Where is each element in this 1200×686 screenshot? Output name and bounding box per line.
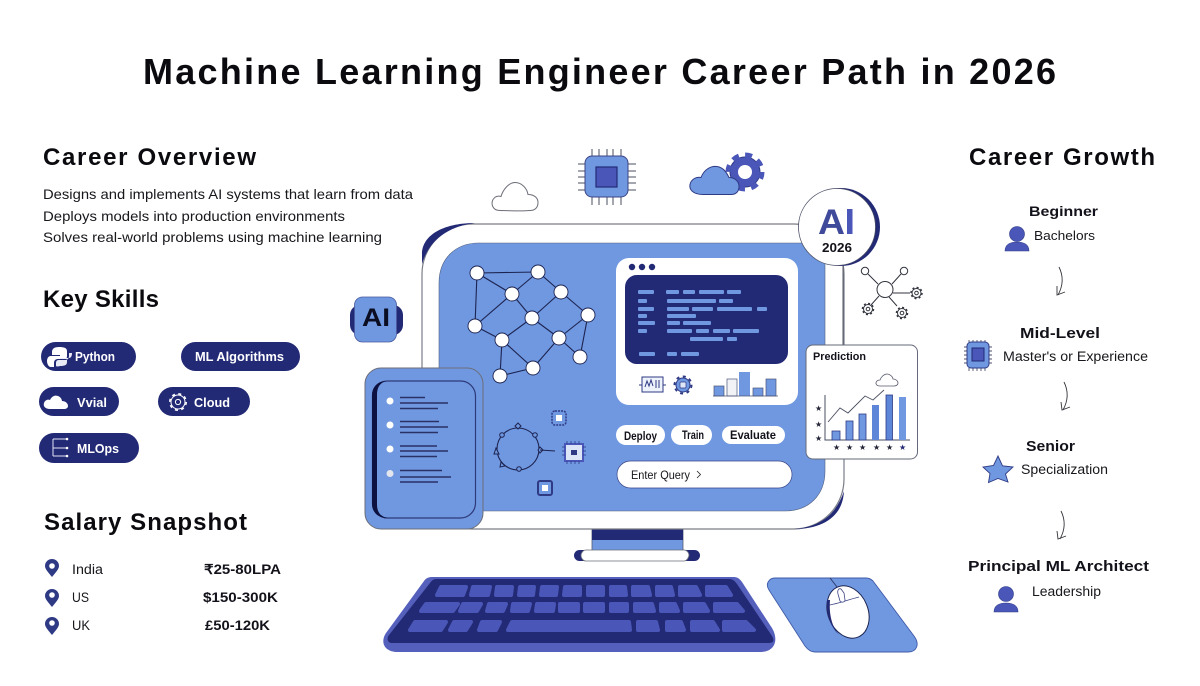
tablet xyxy=(365,368,483,529)
icon: AI robot: AI xyxy=(362,304,390,332)
heading: career overview: Career Overview xyxy=(43,144,256,171)
row: us: $150-300K xyxy=(203,590,278,605)
text block: overview points: Designs and implements AI systems that learn from data xyxy=(43,186,413,202)
button: deploy: Deploy xyxy=(624,431,658,443)
skill pill: mlops: MLOps xyxy=(77,441,119,456)
row: india: India xyxy=(72,562,104,577)
input: enter query xyxy=(617,461,792,488)
icon: small cloud xyxy=(876,374,898,386)
monitor screen xyxy=(439,243,825,511)
code window xyxy=(616,258,798,405)
row: uk xyxy=(45,617,270,635)
icon: small chip bottom xyxy=(538,481,552,495)
stage: principal ml architect xyxy=(968,559,1149,612)
panel: prediction chart xyxy=(806,345,918,459)
mouse pad xyxy=(767,578,917,652)
arrow: senior to principal xyxy=(1057,511,1066,539)
text block: overview points: Deploys models into production environments xyxy=(43,208,345,224)
bars and trend line xyxy=(815,390,910,452)
stage: principal ml architect: Leadership xyxy=(1032,584,1101,599)
skill pill: vvial: Vvial xyxy=(77,396,107,410)
panel: career growth xyxy=(964,144,1155,612)
row: us: US xyxy=(72,590,89,605)
row: uk: UK xyxy=(72,618,90,633)
stage: beginner xyxy=(1005,203,1099,251)
ring network with chips xyxy=(494,411,586,495)
heading: career growth: Career Growth xyxy=(969,144,1155,171)
icon: gear network xyxy=(861,267,922,318)
row: us xyxy=(45,589,278,607)
monitor xyxy=(422,223,844,561)
button: train xyxy=(671,425,712,445)
stage: senior: Specialization xyxy=(1021,462,1108,477)
skill pill: python xyxy=(41,342,136,371)
bars and trend line: ★ xyxy=(899,443,906,452)
keys xyxy=(410,587,754,630)
bars and trend line: ★ xyxy=(859,443,866,452)
badge: AI 2026: A xyxy=(818,203,845,242)
icon: small chip middle xyxy=(562,441,586,464)
network graph xyxy=(468,265,595,383)
button: evaluate: Evaluate xyxy=(730,430,776,442)
skill pill: ml algorithms xyxy=(181,342,300,371)
prediction card connector xyxy=(842,262,844,345)
skill pill: cloud: Cloud xyxy=(194,395,230,410)
icon: ml module xyxy=(639,377,666,392)
skill pill: ml algorithms: ML Algorithms xyxy=(195,350,284,364)
button: evaluate xyxy=(722,426,785,444)
icon: processor chip xyxy=(578,149,636,205)
stage: senior xyxy=(983,439,1108,482)
mouse xyxy=(819,578,877,645)
stage: mid-level: Mid-Level xyxy=(1020,326,1100,342)
badge: AI 2026 xyxy=(798,188,880,266)
prediction label: Prediction xyxy=(813,351,866,363)
stage: mid-level: Master's or Experience xyxy=(1003,349,1148,364)
text block: overview points xyxy=(43,186,413,245)
heading: salary snapshot: Salary Snapshot xyxy=(44,509,247,536)
bars and trend line: ★ xyxy=(815,420,822,429)
tablet inner accent xyxy=(372,381,387,518)
icon: outline cloud xyxy=(492,182,538,211)
arrow: beginner to mid-level xyxy=(1057,267,1065,295)
icon: cloud and gear xyxy=(690,155,762,194)
row: india xyxy=(45,559,281,577)
stage: beginner: Bachelors xyxy=(1034,228,1096,243)
monitor stand xyxy=(574,529,700,561)
bars and trend line: ★ xyxy=(873,443,880,452)
bezel accent: top left xyxy=(422,223,475,264)
row: uk: £50-120K xyxy=(205,618,270,633)
button: deploy xyxy=(616,425,665,445)
bars and trend line: ★ xyxy=(815,404,822,413)
stage: mid-level xyxy=(964,326,1148,371)
mini bar chart xyxy=(713,372,778,396)
arrow: mid-level to senior xyxy=(1061,382,1070,410)
bezel accent: bottom right xyxy=(794,489,844,529)
bars and trend line: ★ xyxy=(833,443,840,452)
icon: AI robot xyxy=(350,297,403,342)
keyboard deck xyxy=(388,579,773,643)
icon: settings gear xyxy=(674,376,692,394)
text block: overview points: Solves real-world problems using machine learning xyxy=(43,229,382,245)
row: india: ₹25-80LPA xyxy=(204,562,281,577)
stage: senior: Senior xyxy=(1026,439,1075,455)
panel: career overview xyxy=(43,144,413,245)
monitor bezel xyxy=(422,224,844,529)
stage: beginner: Beginner xyxy=(1029,203,1099,219)
panel: key skills xyxy=(39,286,300,463)
badge: AI 2026: 2026 xyxy=(822,240,852,255)
icon: small chip top xyxy=(552,411,566,425)
input: enter query: Enter Query xyxy=(631,470,690,482)
skill pill: mlops xyxy=(39,433,139,463)
skill pill: vvial xyxy=(39,387,119,416)
bars and trend line: ★ xyxy=(815,434,822,443)
title: Machine Learning Engineer Career Path in 2026 xyxy=(143,51,1056,92)
skill pill: cloud xyxy=(158,387,250,416)
stage: principal ml architect: Principal ML Architect xyxy=(968,559,1149,575)
tablet inner panel xyxy=(372,381,476,518)
list rows xyxy=(386,398,451,482)
panel: salary snapshot xyxy=(44,509,281,635)
button: train: Train xyxy=(682,430,704,442)
bars and trend line: ★ xyxy=(886,443,893,452)
heading: key skills: Key Skills xyxy=(43,286,159,313)
skill pill: python: Python xyxy=(75,350,115,364)
keyboard xyxy=(383,577,775,652)
bars and trend line: ★ xyxy=(846,443,853,452)
